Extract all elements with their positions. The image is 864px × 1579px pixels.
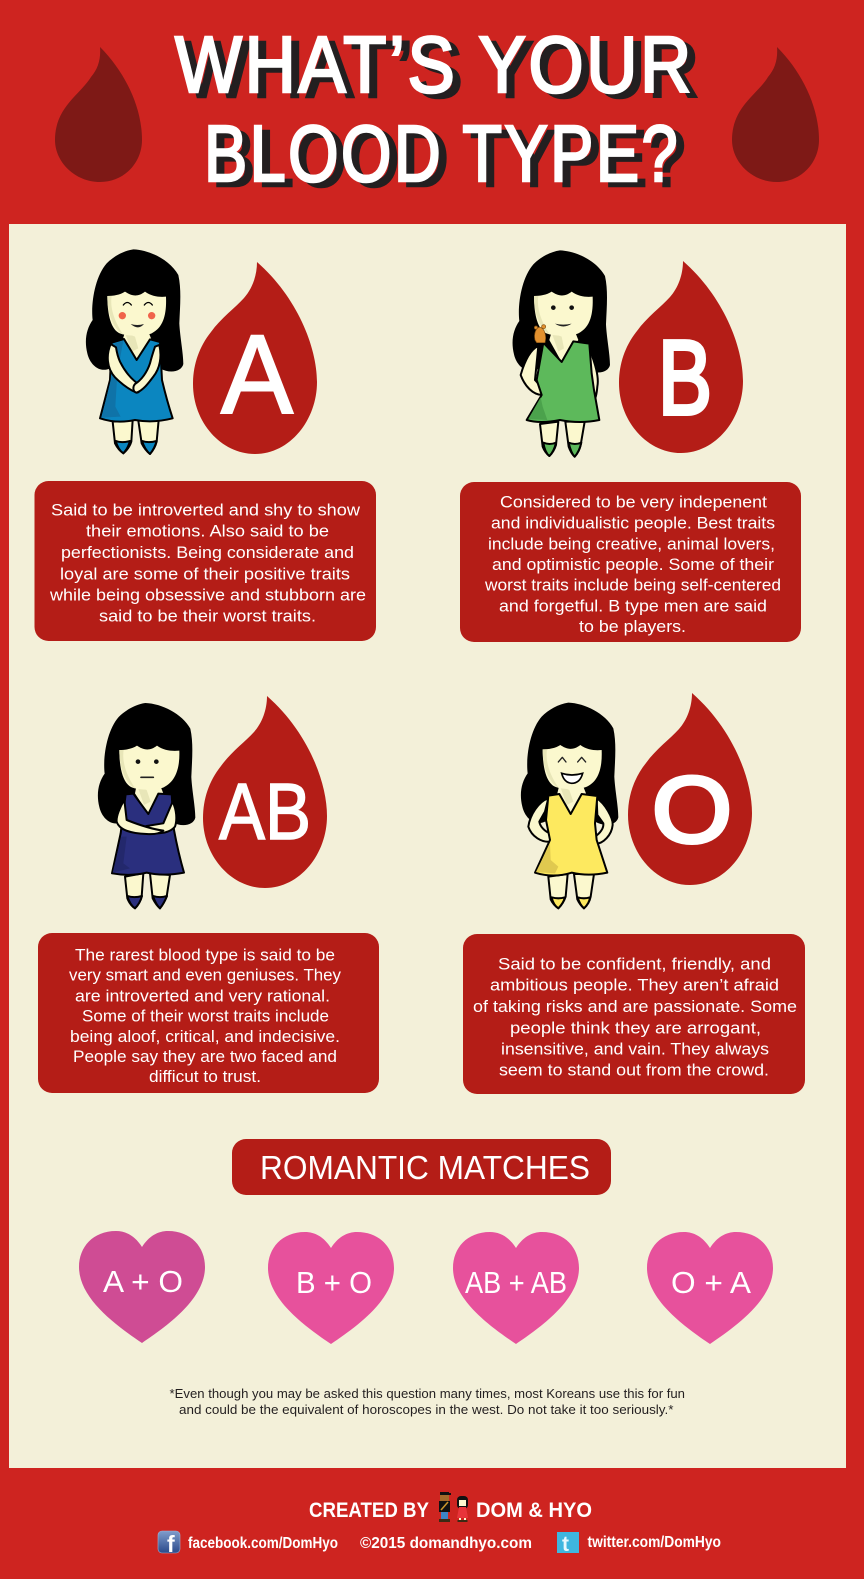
credit line: DOM & HYO: [476, 1499, 592, 1522]
text box: type O: [463, 934, 805, 1094]
text box: type AB: Some of their worst traits include: [82, 1008, 329, 1026]
section: type O: [463, 693, 805, 1094]
text box: type AB: People say they are two faced and: [73, 1048, 337, 1066]
text box: type O: seem to stand out from the crowd.: [499, 1061, 769, 1079]
section: type AB: [38, 696, 379, 1093]
heading: romantic matches: ROMANTIC MATCHES: [260, 1150, 590, 1187]
text box: type O: people think they are arrogant,: [510, 1019, 761, 1037]
heart: A + O: A + O: [103, 1264, 183, 1299]
icon: Hyo avatar: [457, 1496, 468, 1522]
text box: type O: Said to be confident, friendly, and: [498, 956, 771, 974]
icon: drop A: A: [221, 312, 293, 437]
icon: Dom avatar: [439, 1492, 451, 1522]
heart: B + O: [268, 1232, 394, 1344]
credit line: [309, 1499, 592, 1522]
heart: O + A: O + A: [671, 1265, 751, 1300]
title: BLOOD TYPE?: [212, 114, 688, 203]
text box: type A: while being obsessive and stubborn are: [49, 586, 366, 604]
heading: romantic matches: [232, 1139, 611, 1195]
icon: facebook: [158, 1531, 180, 1557]
text box: type B: and optimistic people. Some of their: [492, 556, 775, 574]
facebook handle: facebook.com/DomHyo: [188, 1535, 338, 1552]
credit line: CREATED BY: [309, 1499, 429, 1522]
icon: drop B: B: [658, 319, 712, 437]
icon: twitter: t: [562, 1533, 569, 1556]
copyright: ©2015 domandhyo.com: [360, 1535, 532, 1552]
section: type A: [34, 249, 376, 641]
text box: type AB: The rarest blood type is said to be: [75, 946, 335, 964]
title: BLOOD TYPE?: [204, 109, 680, 198]
heart: AB + AB: [453, 1232, 579, 1344]
section: type B: [460, 250, 801, 642]
footnote: and could be the equivalent of horoscopes in the west. Do not take it too seriously.*: [179, 1402, 674, 1417]
footnote: *Even though you may be asked this question many times, most Koreans use this for fun: [170, 1386, 685, 1401]
header: [55, 20, 819, 203]
text box: type A: Said to be introverted and shy to show: [51, 502, 360, 520]
icon: drop O: O: [652, 757, 732, 862]
character: smiling girl O: [521, 703, 618, 908]
character: shy girl A: [86, 249, 183, 454]
text box: type AB: are introverted and very rational.: [75, 987, 330, 1005]
text box: type B: [460, 482, 801, 642]
text box: type B: and forgetful. B type men are said: [499, 597, 767, 615]
icon: left header drop: [55, 47, 142, 182]
icon: twitter: [557, 1532, 579, 1556]
text box: type AB: difficut to trust.: [149, 1068, 261, 1086]
footnote: [170, 1386, 685, 1417]
character: arms-crossed girl AB: [98, 703, 195, 908]
icon: right header drop: [732, 47, 819, 182]
icon: facebook: f: [167, 1531, 175, 1557]
text box: type B: worst traits include being self-centered: [484, 577, 781, 595]
icon: pet mouse: [534, 325, 546, 343]
text box: type A: [34, 481, 376, 641]
text box: type B: and individualistic people. Best traits: [491, 514, 775, 532]
text box: type B: to be players.: [579, 618, 686, 636]
text box: type O: of taking risks and are passionate. Some: [473, 998, 797, 1016]
text box: type B: include being creative, animal lovers,: [488, 535, 775, 553]
heart: A + O: [79, 1231, 205, 1343]
title: [175, 20, 702, 203]
title: WHAT’S YOUR: [183, 25, 702, 114]
text box: type B: Considered to be very indepenent: [500, 493, 767, 511]
icon: drop B: [619, 261, 743, 453]
icon: drop AB: AB: [219, 767, 311, 856]
text box: type AB: being aloof, critical, and indecisive.: [70, 1028, 340, 1046]
heart: B + O: B + O: [296, 1265, 372, 1300]
heart: O + A: [647, 1232, 773, 1344]
icon: drop AB: [203, 696, 327, 888]
icon: drop O: [628, 693, 752, 885]
text box: type AB: [38, 933, 379, 1093]
footer: [158, 1492, 721, 1557]
title: WHAT’S YOUR: [175, 20, 694, 109]
panel: content: [9, 224, 846, 1468]
heart: AB + AB: AB + AB: [465, 1265, 567, 1300]
text box: type A: loyal are some of their positive traits: [60, 565, 350, 583]
text box: type O: insensitive, and vain. They always: [501, 1040, 769, 1058]
text box: type AB: very smart and even geniuses. They: [69, 967, 342, 985]
twitter handle: twitter.com/DomHyo: [588, 1534, 721, 1551]
text box: type A: perfectionists. Being considerate and: [61, 544, 354, 562]
text box: type A: said to be their worst traits.: [99, 607, 316, 625]
text box: type A: their emotions. Also said to be: [86, 523, 329, 541]
character: girl with mouse B: [513, 250, 610, 457]
icon: drop A: [193, 262, 317, 454]
text box: type O: ambitious people. They aren’t afraid: [490, 977, 779, 995]
